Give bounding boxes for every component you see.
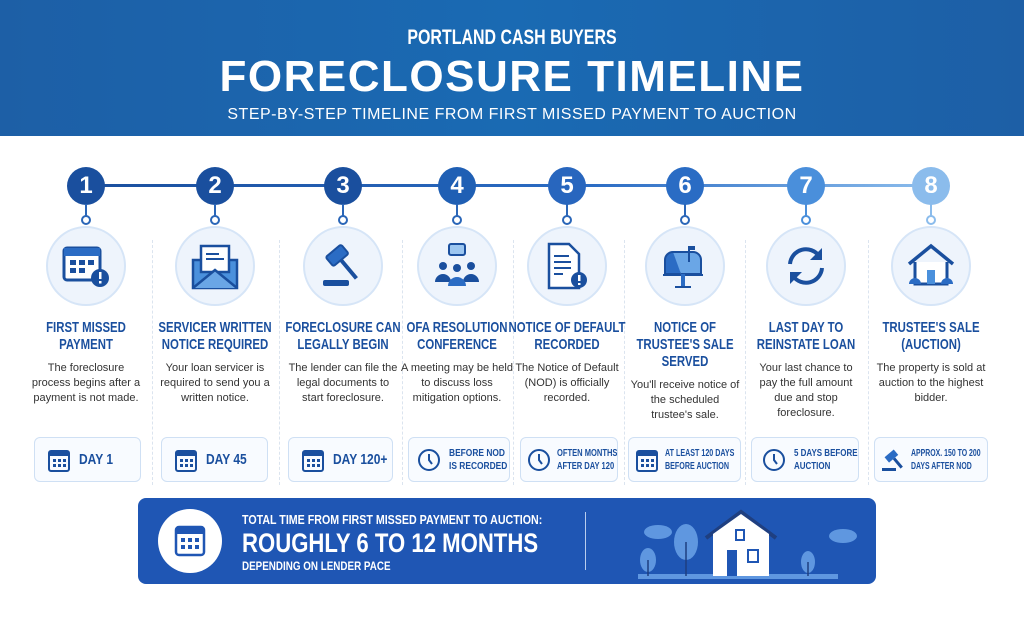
date pill: DAY 120+ (333, 451, 387, 468)
subtitle: STEP-BY-STEP TIMELINE FROM FIRST MISSED PAYMENT TO AUCTION (227, 106, 797, 123)
title: NOTICE OF DEFAULT (509, 319, 625, 336)
step 4 (401, 167, 513, 482)
step 2 (158, 167, 272, 482)
icon: document alert (527, 226, 607, 306)
date pill: BEFORE NOD (449, 446, 505, 458)
summary banner (138, 498, 876, 584)
date pill: AUCTION (794, 460, 830, 472)
step 7 (751, 167, 859, 482)
timeline line (86, 184, 930, 187)
title: FORECLOSURE CAN (285, 319, 401, 336)
step 8 (874, 167, 988, 482)
step 6 (628, 167, 741, 482)
icon: refresh arrows (766, 226, 846, 306)
date pill: OFTEN MONTHS (557, 446, 617, 458)
summary text: ROUGHLY 6 TO 12 MONTHS (242, 528, 538, 558)
date pill: DAY 45 (206, 451, 247, 468)
step 2: 2 (208, 172, 222, 199)
icon: envelope (175, 226, 255, 306)
date pill: AT LEAST 120 DAYS (665, 446, 734, 458)
step 1 (32, 167, 141, 482)
title: OFA RESOLUTION (407, 319, 507, 336)
description: The Notice of Default (NOD) is officially recorded. (515, 362, 619, 404)
title: PAYMENT (59, 336, 113, 353)
title: SERVICER WRITTEN (158, 319, 272, 336)
date pill: AFTER DAY 120 (557, 460, 614, 472)
date pill (520, 437, 618, 482)
summary text: TOTAL TIME FROM FIRST MISSED PAYMENT TO AUCTION: (242, 512, 542, 527)
summary text (242, 512, 542, 573)
title: TRUSTEE'S SALE (636, 336, 734, 353)
main title: FORECLOSURE TIMELINE (220, 52, 804, 101)
title (757, 319, 855, 353)
header banner (0, 0, 1024, 136)
date pill: DAYS AFTER NOD (911, 460, 972, 472)
step 5 (509, 167, 626, 482)
title: (AUCTION) (901, 336, 961, 353)
date pill: IS RECORDED (449, 460, 507, 472)
icon: calendar alert (46, 226, 126, 306)
title (46, 319, 126, 353)
date pill (408, 437, 510, 482)
brand name: PORTLAND CASH BUYERS (407, 26, 617, 49)
description: You'll receive notice of the scheduled trustee's sale. (631, 379, 739, 421)
title: FIRST MISSED (46, 319, 126, 336)
date pill (161, 437, 268, 482)
description: The property is sold at auction to the highest bidder. (877, 362, 985, 404)
title: LAST DAY TO (769, 319, 843, 336)
illustration: house and trees (638, 510, 857, 579)
summary text: DEPENDING ON LENDER PACE (242, 559, 391, 573)
date pill (288, 437, 393, 482)
title (407, 319, 507, 353)
title (285, 319, 401, 353)
title (158, 319, 272, 353)
title: RECORDED (534, 336, 600, 353)
title (636, 319, 734, 370)
step 6: 6 (678, 172, 692, 199)
date pill (628, 437, 741, 482)
step 3 (285, 167, 401, 482)
title: NOTICE REQUIRED (162, 336, 268, 353)
title (509, 319, 626, 353)
step 8: 8 (924, 172, 938, 199)
title: SERVED (662, 353, 708, 370)
icon: house (891, 226, 971, 306)
description: The lender can file the legal documents to start foreclosure. (289, 362, 397, 404)
description: Your last chance to pay the full amount due and stop foreclosure. (759, 362, 853, 419)
date pill: 5 DAYS BEFORE (794, 446, 858, 458)
icon: meeting people (417, 226, 497, 306)
date pill (874, 437, 988, 482)
step 1: 1 (79, 172, 93, 199)
step 4: 4 (450, 172, 464, 199)
title (882, 319, 980, 353)
date pill (751, 437, 859, 482)
description: The foreclosure process begins after a payment is not made. (32, 362, 140, 404)
icon: calendar circle (158, 509, 222, 573)
title: REINSTATE LOAN (757, 336, 855, 353)
icon: mailbox (645, 226, 725, 306)
step 3: 3 (336, 172, 350, 199)
description: Your loan servicer is required to send you a written notice. (160, 362, 270, 404)
title: TRUSTEE'S SALE (882, 319, 980, 336)
date pill (34, 437, 141, 482)
icon: gavel (303, 226, 383, 306)
step 7: 7 (799, 172, 813, 199)
date pill: DAY 1 (79, 451, 113, 468)
step 5: 5 (560, 172, 574, 199)
date pill: APPROX. 150 TO 200 (911, 446, 981, 458)
date pill: BEFORE AUCTION (665, 460, 729, 472)
title: CONFERENCE (417, 336, 497, 353)
title: NOTICE OF (654, 319, 716, 336)
description: A meeting may be held to discuss loss mitigation options. (401, 362, 513, 404)
title: LEGALLY BEGIN (297, 336, 389, 353)
